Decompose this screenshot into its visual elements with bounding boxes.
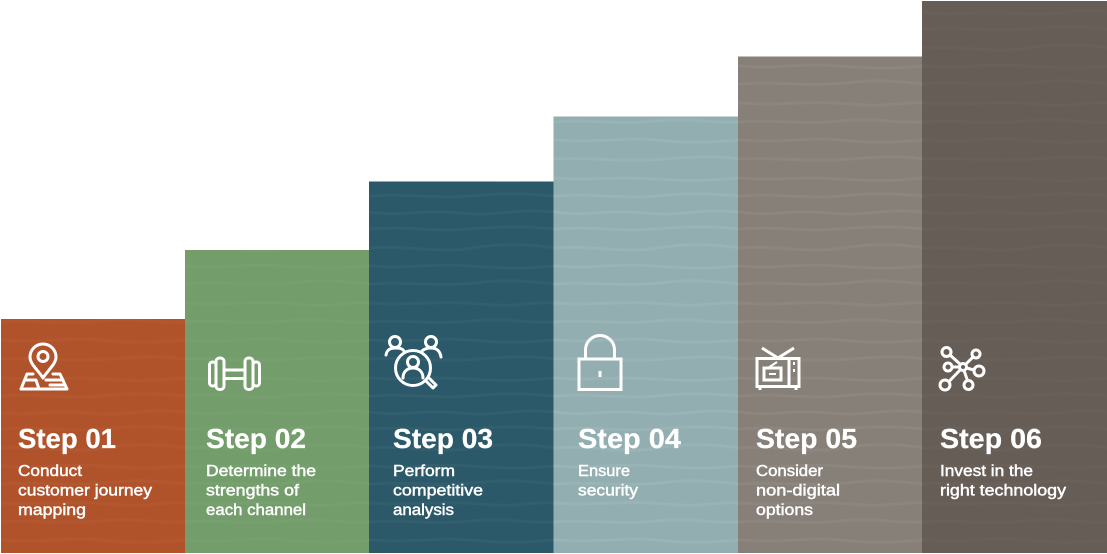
text: step 05 description: Consider xyxy=(756,463,823,480)
text: step 05 description xyxy=(756,463,840,519)
icon: dumbbell xyxy=(210,358,260,390)
text: step 01 description: mapping xyxy=(18,502,86,519)
text: step 03 description xyxy=(393,463,483,519)
text: step 01 description xyxy=(18,463,152,519)
text: step 05 description: non-digital xyxy=(756,482,840,500)
heading: step 06: Step 06 xyxy=(940,423,1042,454)
panel: step 05 xyxy=(738,56,922,553)
heading: step 02: Step 02 xyxy=(206,423,306,454)
panel: step 04 xyxy=(554,116,738,553)
icon: connected network nodes xyxy=(940,348,984,390)
panel: step 02 xyxy=(185,250,369,553)
text: step 02 description xyxy=(206,463,316,519)
text: step 06 description: Invest in the xyxy=(940,463,1033,480)
text: step 03 description: Perform xyxy=(393,463,455,480)
icon: television xyxy=(757,348,799,390)
panel: step 06 xyxy=(922,1,1107,553)
heading: step 03: Step 03 xyxy=(393,423,493,454)
text: step 03 description: competitive xyxy=(393,482,483,500)
text: step 02 description: strengths of xyxy=(206,482,300,500)
text: step 05 description: options xyxy=(756,502,813,519)
heading: step 05: Step 05 xyxy=(756,423,857,454)
heading: step 04: Step 04 xyxy=(578,423,682,454)
text: step 06 description xyxy=(940,463,1066,500)
heading: step 01: Step 01 xyxy=(18,423,116,454)
panel: step 01 xyxy=(1,319,185,553)
text: step 02 description: Determine the xyxy=(206,463,316,480)
text: step 03 description: analysis xyxy=(393,502,454,519)
icon: map pin on a map xyxy=(21,344,67,389)
text: step 04 description: security xyxy=(578,482,638,500)
icon: people under a magnifying glass xyxy=(386,336,441,388)
text: step 01 description: customer journey xyxy=(18,482,152,500)
icon: padlock xyxy=(579,336,621,390)
text: step 06 description: right technology xyxy=(940,482,1066,500)
text: step 04 description: Ensure xyxy=(578,463,630,480)
text: step 01 description: Conduct xyxy=(18,463,83,480)
panel: step 03 xyxy=(369,182,554,553)
text: step 04 description xyxy=(578,463,638,500)
text: step 02 description: each channel xyxy=(206,502,306,519)
